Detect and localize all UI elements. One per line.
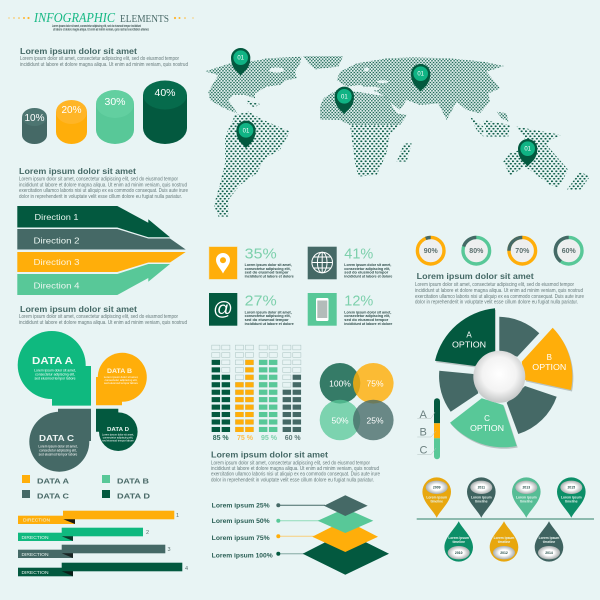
pin 2013	[512, 477, 541, 518]
text block: directions heading: Lorem ipsum dolor sit amet	[19, 166, 136, 176]
scale: A B C	[417, 398, 440, 459]
stat: 27%: Lorem ipsum dolor sit amet,	[245, 310, 292, 314]
map pin: Australia: 01	[524, 147, 532, 153]
cylinder 30%	[96, 90, 134, 144]
stat: 35%	[209, 246, 294, 279]
petal: data A: DATA A	[32, 356, 73, 367]
legend	[22, 475, 151, 500]
column group 75%	[239, 360, 249, 434]
text block: directions heading: Lorem ipsum dolor sit amet, consectetur adipiscing elit, sed do eiusmod tempor	[19, 176, 178, 182]
pin 2014: Lorem ipsum	[539, 536, 559, 540]
pin 2012: Lorem ipsum	[494, 536, 514, 540]
column group 60%	[287, 375, 297, 434]
cylinder 10%	[22, 108, 47, 144]
pin 2010: 2010	[455, 551, 463, 555]
cylinder 20%: 20%	[61, 105, 82, 116]
south hemisphere dots	[214, 100, 590, 217]
donut 60%: 60%	[562, 248, 576, 255]
segment: slate top	[499, 317, 539, 357]
text block: data heading: Lorem ipsum dolor sit amet	[20, 304, 137, 314]
cylinder 40%	[143, 80, 187, 144]
stat: 41%: consectetur adipiscing elit,	[344, 267, 390, 271]
text block: cylinders heading	[20, 46, 188, 68]
petal: data B: sed eiusmod tempor labore	[104, 381, 138, 385]
petal: data D: Lorem ipsum dolor sit amet,	[102, 432, 134, 436]
direction 1	[17, 206, 170, 237]
bar 1: DIRECTION	[23, 518, 50, 523]
donut 70%: 70%	[515, 248, 530, 255]
petal: data A: sed eiusmod tempor labore	[34, 376, 76, 380]
text block: layers heading: Lorem ipsum dolor sit amet	[211, 450, 328, 460]
stat: 12%: incididunt ut labore et dolore	[344, 322, 392, 326]
segment: B option: OPTION	[532, 363, 567, 372]
north hemisphere dots	[205, 56, 508, 125]
text block: data heading: Lorem ipsum dolor sit amet, consectetur adipiscing elit, sed do eiusmod tempor	[19, 314, 178, 320]
timeline	[417, 477, 594, 562]
text block: layers heading	[211, 450, 380, 483]
pin 2012: 2012	[500, 551, 508, 555]
pin 2012: timeline	[498, 540, 510, 544]
stat: 27%: 27%	[245, 294, 277, 310]
pin 2011: timeline	[475, 500, 488, 504]
donut 90%	[417, 237, 444, 264]
segment: slate right	[507, 386, 557, 434]
text block: options heading: Lorem ipsum dolor sit amet	[417, 271, 534, 281]
pin 2015	[557, 477, 586, 518]
pin 2011	[467, 477, 496, 518]
bar 3	[18, 545, 171, 558]
venn circles: 50%	[331, 416, 349, 426]
icon: phone	[316, 298, 328, 321]
venn circles	[320, 363, 394, 440]
map pin: North America	[231, 48, 250, 76]
stat: 12%: sed do eiusmod tempor	[344, 318, 389, 322]
bar 1	[18, 511, 179, 524]
segment: A option: OPTION	[452, 340, 486, 349]
segment: C option: C	[484, 414, 490, 423]
petal: data A: Lorem ipsum dolor sit amet,	[34, 368, 76, 372]
segment: C option	[450, 398, 517, 447]
donut 80%	[463, 237, 490, 264]
pin 2012	[490, 521, 518, 562]
bar 3: DIRECTION	[22, 552, 48, 557]
stat: 27%: consectetur adipiscing elit,	[245, 314, 291, 318]
text block: options heading	[415, 271, 584, 306]
direction 2: Direction 2	[34, 236, 80, 246]
legend: DATA A	[37, 476, 70, 486]
text block: data heading: incididunt ut labore et dolore magna aliqua. Ut enim ad minim veniam, quis nostrud	[19, 320, 187, 326]
stat: 35%: incididunt ut labore et dolore	[245, 274, 294, 278]
layered diamonds	[212, 495, 389, 575]
waffle labels: 95 %	[261, 435, 278, 442]
world map	[205, 48, 590, 217]
title: Lorem ipsum dolor sit amet, consectetur adipiscing elit, sed do eiusmod tempor incididunt	[52, 24, 142, 28]
direction 2	[17, 229, 186, 250]
title: ut labore et dolore magna aliqua. Ut enim ad minim veniam, quis nostrud exercitation ullamco	[53, 28, 149, 32]
stat: 27%: sed do eiusmod tempor	[245, 318, 289, 322]
donut row	[417, 237, 582, 264]
stat: 12%	[308, 293, 392, 326]
layered diamonds: Lorem ipsum 75%	[212, 535, 270, 542]
map pin: Asia	[411, 64, 430, 92]
waffle labels: 85 %	[213, 435, 229, 442]
arrows: directions	[17, 206, 186, 295]
petal: data D	[96, 409, 138, 451]
text block: layers heading: dolor in reprehenderit in voluptate velit esse cillum dolore eu fugiat nulla pariatur.	[211, 477, 374, 483]
cylinder 40%: 40%	[154, 87, 176, 99]
pin 2014	[535, 521, 563, 562]
petal: data D: DATA D	[107, 427, 129, 433]
petal: data C: DATA C	[39, 433, 74, 443]
stat: 41%: incididunt ut labore et dolore	[344, 274, 392, 278]
direction 4: Direction 4	[34, 282, 80, 290]
stat: 35%: 35%	[245, 246, 277, 262]
petal: data A	[18, 331, 91, 406]
pin 2014: timeline	[543, 540, 555, 544]
direction 3: Direction 3	[34, 258, 80, 267]
stat: 41%: 41%	[344, 246, 373, 262]
petal: data C: consectetur adipiscing elit,	[39, 448, 77, 452]
text block: layers heading: Lorem ipsum dolor sit amet, consectetur adipiscing elit, sed do eiusmod tempor	[211, 460, 370, 466]
venn circles: 100%	[329, 378, 351, 388]
segment: slate left	[439, 371, 478, 412]
segment shadows	[436, 310, 573, 449]
petal: data C	[29, 409, 91, 472]
stat: 41%: Lorem ipsum dolor sit amet,	[344, 263, 391, 267]
panel: four petals	[18, 331, 147, 472]
pin 2011: Lorem ipsum	[471, 496, 492, 500]
stat: 35%: Lorem ipsum dolor sit amet,	[245, 263, 292, 267]
cylinder 30%: 30%	[104, 96, 126, 108]
venn circles: 25%	[366, 416, 384, 426]
text block: directions heading: dolor in reprehenderit in voluptate velit esse cillum dolore eu fugiat nulla pariatur.	[19, 194, 182, 200]
pin 2015: 2015	[568, 486, 575, 490]
stat: 12%: Lorem ipsum dolor sit amet,	[344, 310, 391, 314]
donut 70%	[509, 237, 536, 264]
map pin: North America: 01	[237, 56, 245, 62]
scale: A B C: C	[420, 444, 428, 456]
waffle labels: 60 %	[285, 435, 301, 442]
text block: layers heading: incididunt ut labore et dolore magna aliqua. Ut enim ad minim veniam, quis nostrud	[211, 466, 379, 472]
bar 1: 1	[176, 513, 179, 519]
pin 2009: timeline	[430, 500, 443, 504]
petal: data B: DATA B	[107, 368, 132, 375]
pin 2013: Lorem ipsum	[516, 496, 537, 500]
map pin: South America: 01	[243, 128, 250, 134]
bar 2	[18, 528, 149, 541]
centre sphere	[473, 351, 525, 403]
pin 2013: 2013	[523, 486, 530, 490]
pie chart: options	[435, 308, 573, 449]
legend: DATA C	[37, 492, 70, 500]
text block: options heading: dolor in reprehenderit in voluptate velit esse cillum dolore eu fugiat nulla pariatur.	[415, 300, 578, 306]
map pin: South America	[236, 121, 256, 148]
segment: C option: OPTION	[470, 424, 504, 433]
text block: layers heading: exercitation ullamco laboris nisi ut aliquip ex ea commodo consequat. Duis aute irure	[211, 472, 380, 478]
pin 2015: timeline	[565, 500, 578, 504]
bar 2: 2	[146, 530, 149, 536]
donut 60%	[555, 237, 582, 264]
segment: B option	[522, 328, 572, 390]
stat: 35%: consectetur adipiscing elit,	[245, 267, 291, 271]
layered diamonds: Lorem ipsum 100%	[212, 553, 273, 560]
segment: B option: B	[547, 353, 552, 362]
pin 2009: 2009	[433, 486, 441, 490]
pin 2010	[444, 521, 473, 562]
stat: 12%: consectetur adipiscing elit,	[344, 314, 390, 318]
pin 2010: Lorem ipsum	[448, 536, 469, 540]
icon: globe	[312, 252, 333, 273]
petal: data A: consectetur adipiscing elit,	[35, 372, 75, 376]
pin 2011: 2011	[478, 486, 485, 490]
cylinder 10%: 10%	[24, 113, 45, 124]
pin 2013: timeline	[520, 500, 533, 504]
donut 90%: 90%	[424, 248, 438, 255]
segment: A option	[435, 308, 495, 366]
pin 2009: Lorem ipsum	[426, 496, 447, 500]
column group 85%	[216, 360, 226, 434]
petal: data B: consectetur adipiscing elit,	[105, 378, 138, 382]
title: ELEMENTS	[120, 14, 169, 25]
bar 2: DIRECTION	[22, 535, 48, 540]
stat: 35%: sed do eiusmod tempor	[245, 271, 289, 275]
layered diamonds: Lorem ipsum 25%	[212, 502, 270, 509]
bar 4: DIRECTION	[22, 570, 48, 575]
venn circles: 75%	[366, 378, 384, 388]
stat: 12%: 12%	[344, 294, 373, 310]
stat: 41%	[308, 246, 392, 279]
text block: directions heading: exercitation ullamco laboris nisi ut aliquip ex ea commodo consequat. Duis aute irure	[19, 188, 188, 194]
column group 95%	[263, 360, 273, 434]
bar 4: 4	[185, 566, 188, 572]
map pin: Africa: 01	[341, 94, 348, 100]
petal: data C: sed eiusmod tempor labore	[39, 452, 78, 456]
scale: A B C: B	[420, 426, 427, 438]
text block: directions heading: incididunt ut labore et dolore magna aliqua. Ut enim ad minim veniam, quis nostrud	[19, 182, 187, 188]
text block: cylinders heading: incididunt ut labore et dolore magna aliqua. Ut enim ad minim veniam, quis nostrud	[20, 62, 188, 68]
layered diamonds: Lorem ipsum 50%	[212, 518, 270, 525]
pin 2015: Lorem ipsum	[561, 496, 582, 500]
map pin: Asia: 01	[417, 72, 425, 78]
title: INFOGRAPHIC	[33, 10, 116, 25]
petal: data C: Lorem ipsum dolor sit amet,	[38, 444, 78, 448]
icon: at sign: @	[213, 298, 233, 320]
direction 1: Direction 1	[34, 213, 79, 222]
waffle labels	[213, 435, 301, 442]
cylinder 20%	[56, 100, 87, 144]
direction 3	[17, 252, 186, 272]
segment: A option: A	[466, 330, 472, 339]
scale: A B C: A	[420, 409, 428, 421]
bar chart: directions	[18, 511, 188, 576]
pin 2014: 2014	[545, 551, 553, 555]
text block: options heading: incididunt ut labore et dolore magna aliqua. Ut enim ad minim veniam, quis nostrud	[415, 288, 583, 294]
waffle chart	[213, 345, 301, 442]
stat: 27%	[209, 293, 294, 326]
petal: data B: Lorem ipsum dolor sit amet,	[104, 375, 138, 379]
bar 4	[18, 563, 188, 576]
pin 2009	[422, 477, 451, 518]
waffle labels: 75 %	[237, 435, 254, 442]
title	[8, 10, 194, 32]
map pin: Africa	[335, 87, 354, 114]
text block: options heading: Lorem ipsum dolor sit amet, consectetur adipiscing elit, sed do eiusmod tempor	[415, 282, 574, 288]
stat: 41%: sed do eiusmod tempor	[344, 271, 389, 275]
stat: 27%: incididunt ut labore et dolore	[245, 322, 294, 326]
map pin: Australia	[518, 139, 537, 167]
text block: cylinders heading: Lorem ipsum dolor sit amet	[20, 46, 137, 56]
petal: data D: sed eiusmod tempor labore	[102, 438, 134, 442]
direction 4	[17, 264, 170, 295]
bar 3: 3	[168, 547, 171, 553]
icon: location pin	[216, 253, 230, 274]
legend: DATA D	[117, 492, 151, 500]
donut 80%: 80%	[469, 248, 484, 255]
pin 2010: timeline	[452, 540, 465, 544]
text block: directions heading	[19, 166, 188, 200]
legend: DATA B	[117, 476, 150, 486]
petal: data B	[96, 353, 147, 405]
text block: cylinders heading: Lorem ipsum dolor sit amet, consectetur adipiscing elit, sed do eiusmod tempor	[20, 56, 179, 62]
bar chart: cylinders	[22, 80, 187, 144]
text block: data heading	[19, 304, 187, 326]
petal: data D: consectetur adipiscing elit,	[103, 436, 133, 440]
